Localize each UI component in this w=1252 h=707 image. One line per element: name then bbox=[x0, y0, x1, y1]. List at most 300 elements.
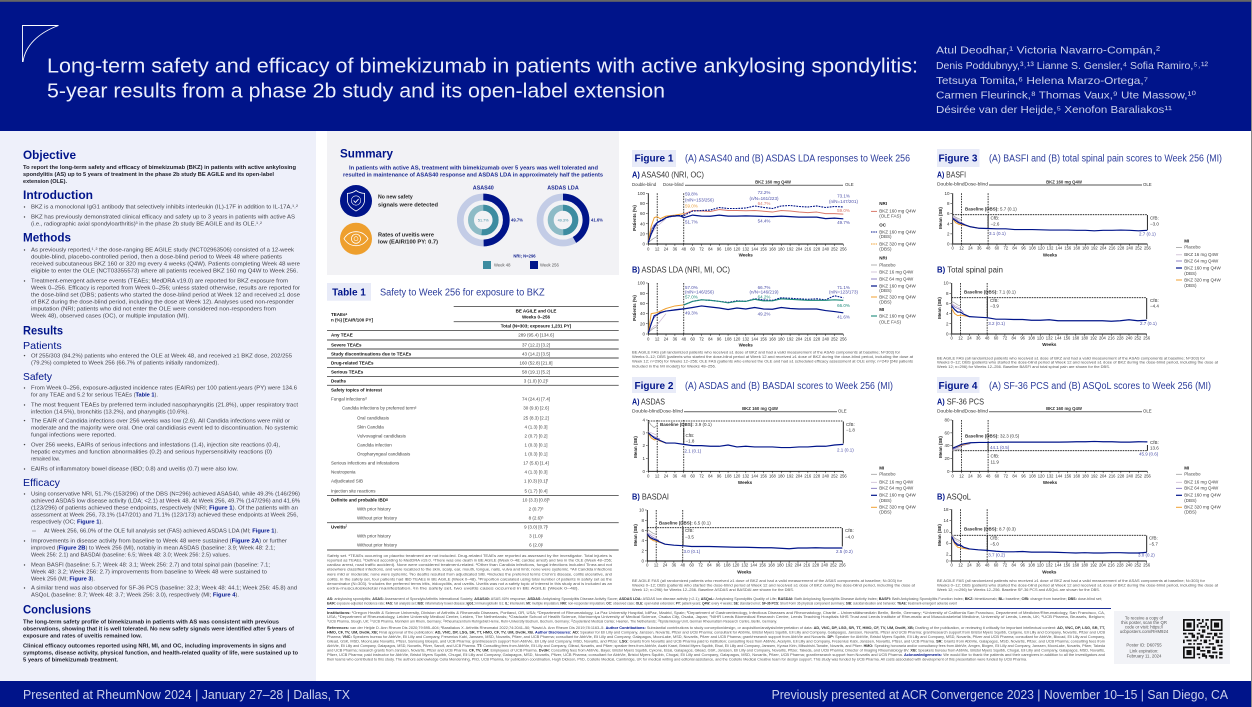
table header cells: Weeks 0–256 bbox=[522, 314, 550, 319]
table rows: safety topics of interest: Oral candidiasis bbox=[357, 416, 390, 421]
table footnote: denominator (N=303). ⁱIncludes the preferred terms iritis, iridocyclitis, and uveitis. Uveitis was not a safety topic of interest in this study and is included as an bbox=[327, 580, 612, 586]
legend figure 1: (DBS) bbox=[879, 288, 892, 293]
figure 1 heading: Figure 1 bbox=[635, 154, 674, 165]
panel: left column background and text bbox=[0, 131, 316, 681]
figure 3 heading: Figure 3 bbox=[939, 154, 978, 165]
line chart: ASDAS LDA: Weeks bbox=[739, 342, 753, 348]
line chart: BASDAI: 0 bbox=[646, 563, 649, 568]
line chart: BASDAI: 3.0 (0.1) bbox=[684, 549, 701, 554]
donut chart: ASDAS LDA: 49.3% bbox=[558, 219, 569, 223]
line chart: ASDAS LDA: Patients (%) bbox=[632, 295, 637, 321]
line chart: ASDAS LDA: 96 bbox=[717, 336, 722, 342]
legend figure 2: (DBS) bbox=[879, 510, 892, 514]
table rows: bold events: 43 (14.2) [3.5] bbox=[522, 352, 550, 357]
legend figure 2: BKZ 16 mg Q4W bbox=[879, 480, 914, 484]
line chart: BASFI: 4 bbox=[947, 221, 950, 226]
legend figure 4: BKZ 64 mg Q4W bbox=[1184, 486, 1219, 490]
treatment timeline: Double-blindDose-blind bbox=[632, 408, 684, 413]
line chart: BASFI: Mean (SE) bbox=[938, 207, 943, 229]
legend figure 2: (DBS) bbox=[879, 498, 892, 503]
line chart: BASFI: 192 bbox=[1091, 246, 1098, 251]
line chart: ASQoL: 6 bbox=[946, 541, 949, 546]
line chart: total spinal pain: 4 bbox=[946, 311, 949, 316]
line chart: ASDAS LDA: (n/N=146/219) bbox=[750, 290, 779, 294]
line chart: ASQoL: −5.7 bbox=[1149, 542, 1158, 546]
line chart: SF-36 PCS: 60 bbox=[995, 474, 1000, 478]
conclusions text: The long-term safety profile of bimekizumab in patients with AS was consistent with previous bbox=[23, 619, 279, 625]
line chart: SF-36 PCS: 252 bbox=[1135, 474, 1143, 478]
table rows: safety topics of interest: Candida infection bbox=[357, 443, 392, 448]
legend figure 3 bbox=[1176, 238, 1222, 288]
line chart: ASAS40: 40 bbox=[640, 221, 645, 226]
treatment timeline A bbox=[632, 179, 854, 187]
abbreviations bbox=[327, 597, 1102, 606]
line chart: total spinal pain: 108 bbox=[1028, 336, 1036, 340]
line chart: ASDAS: 4 bbox=[642, 418, 645, 423]
line chart: total spinal pain: 228 bbox=[1117, 336, 1124, 340]
table rows: safety topics of interest: 5 (1.7) [0.4] bbox=[524, 489, 548, 494]
previously presented at: Previously presented at ACR Convergence 2023 | November 10–15 | San Diego, CA bbox=[772, 688, 1229, 702]
figure 1 footnote bbox=[632, 350, 913, 368]
line chart: ASDAS: Baseline (DBS): 3.9 (0.1) bbox=[660, 422, 712, 427]
icon: shield bbox=[340, 185, 372, 217]
figure 2 footnote bbox=[632, 579, 915, 592]
line chart: ASAS40: 204 bbox=[796, 246, 803, 252]
line chart: total spinal pain: 168 bbox=[1072, 336, 1080, 340]
table rows: IBD and uveitis: With prior history bbox=[357, 507, 392, 512]
line chart: SF-36 PCS: 156 bbox=[1064, 474, 1072, 478]
figure 1 footnote: Weeks 0–12; DBS (patients who started the dose-blind period at Week 12 and received ≥1 dose of BKZ during the dose-blind period, including the dose at bbox=[632, 355, 913, 359]
line chart: ASQoL: CfB: bbox=[990, 536, 999, 540]
line chart: SF-36 PCS: 0 bbox=[947, 469, 950, 474]
line chart: SF-36 PCS: CfB: bbox=[1150, 440, 1159, 445]
line chart: BASFI: 256 bbox=[1144, 246, 1152, 251]
line chart: BASFI: 2.7 (0.1) bbox=[1139, 232, 1156, 236]
conclusions text: symptoms, disease activity, physical function, and health-related quality of life, were sustained up to bbox=[23, 650, 299, 656]
table header cells bbox=[327, 308, 619, 550]
references and disclosures: their teams who contributed to this study. The authors acknowledge Celia Mendenhing, PhD, UCB Pharma, for publication coordination, Hugh Dickson, PhD, Costello Medical, Cambridge, UK for medical writing and editorial assistance, and the Costello Medical Creative team for design support. This study was funded by UCB Pharma. All costs associated with development of this presentation were funded by UCB Pharma. bbox=[327, 658, 1027, 662]
efficacy text: Week 256 (MI; Figure 3). bbox=[31, 577, 95, 583]
line chart: ASQoL: 168 bbox=[1072, 563, 1080, 568]
treatment timeline A: Dose-blind bbox=[663, 182, 684, 187]
line chart: ASQoL: Mean (SE) bbox=[937, 524, 942, 546]
heading: conclusions: Conclusions bbox=[23, 602, 91, 616]
line chart: BASFI: 84 bbox=[1012, 246, 1018, 251]
figure 2 heading bbox=[632, 377, 893, 393]
table heading: Table 1 bbox=[332, 288, 366, 299]
line chart: BASDAI: Baseline (DBS): 6.5 (0.1) bbox=[659, 520, 711, 526]
line chart: ASDAS: 24 bbox=[664, 474, 669, 478]
figure 4 heading: Figure 4 bbox=[939, 381, 978, 392]
line chart: BASFI: −2.6 bbox=[990, 222, 1000, 226]
table rows: bold events: Any TEAE bbox=[331, 333, 353, 338]
text: no new safety signals: signals were detected bbox=[378, 203, 439, 209]
legend figure 4 bbox=[1176, 466, 1222, 514]
title: Long-term safety and efficacy of bimekizumab in patients with active ankylosing spondylitis: bbox=[47, 56, 918, 78]
line chart: SF-36 PCS: 132 bbox=[1047, 474, 1054, 478]
line chart: SF-36 PCS: 120 bbox=[1038, 474, 1045, 478]
line chart: ASDAS: 240 bbox=[822, 474, 830, 478]
line chart: SF-36 PCS: 60 bbox=[944, 430, 950, 435]
authors: Désirée van der Heijde,⁵ Xenofon Baraliakos¹¹ bbox=[936, 104, 1173, 116]
line chart: ASAS40: 49.7% bbox=[837, 220, 850, 225]
line chart: ASAS40: 132 bbox=[742, 246, 750, 252]
line chart: ASDAS LDA: 57.0% bbox=[685, 285, 698, 290]
donut chart: ASDAS LDA: 41.6% bbox=[591, 218, 603, 223]
treatment timeline: OLE bbox=[838, 409, 847, 414]
line chart: ASQoL: 3.0 (0.2) bbox=[1138, 552, 1155, 558]
line chart: BASDAI: 72 bbox=[698, 563, 703, 568]
line chart: BASDAI: 8 bbox=[641, 518, 644, 523]
line chart: ASAS40: 24 bbox=[664, 246, 669, 252]
figure 4 heading: (A) SF-36 PCS and (B) ASQoL scores to Week 256 (MI) bbox=[989, 381, 1211, 392]
table rows: bold events: Severe TEAEs bbox=[331, 342, 362, 347]
line chart: ASAS40: 144 bbox=[751, 246, 759, 252]
safety text: remained low. bbox=[31, 456, 60, 462]
authors: Denis Poddubnyy,³˒¹³ Lianne S. Gensler,⁴ Sofia Ramiro,⁵˒¹² bbox=[936, 60, 1208, 72]
line chart: BASDAI: 240 bbox=[821, 563, 829, 568]
line chart: ASDAS LDA: 41.6% bbox=[837, 314, 850, 319]
line chart: BASDAI: 192 bbox=[786, 563, 793, 568]
treatment timeline: BKZ 160 mg Q4W bbox=[742, 406, 779, 411]
line chart: total spinal pain: 256 bbox=[1143, 336, 1151, 340]
line chart: ASDAS LDA bbox=[632, 281, 858, 348]
line chart: ASAS40: 96 bbox=[717, 246, 722, 252]
references and disclosures: Pfizer, UCB Pharma; paid instructor for AbbVie, Bristol Myers Squibb, Chugai, Eli Lilly and Company, Galapagos, MSD, Novartis, Pfizer, UCB Pharma; consultant for AbbVie, Bristol Myers Squibb, Chugai, Eli Lilly and Company, Galapagos, MSD, Novartis, Pfizer, UCB Pharma; grant/research support from Novartis and UCB Pharma. Acknowledgements: We would like to thank the patients and their caregivers in addition to all the investigators and bbox=[327, 653, 1105, 657]
line chart: SF-36 PCS: 11.9 bbox=[990, 460, 999, 464]
line chart: ASDAS LDA: 60 bbox=[640, 301, 645, 306]
figure 2 heading: (A) ASDAS and (B) BASDAI scores to Week 256 (MI) bbox=[685, 381, 893, 392]
line chart: BASDAI: 252 bbox=[830, 563, 838, 568]
efficacy text: ASQoL (baseline: 8.7; Week 48: 3.7; Week 256: 3.0), respectively (MI; Figure 4 ). bbox=[31, 593, 239, 599]
legend figure 4: (DBS) bbox=[1184, 498, 1197, 503]
table rows: IBD and uveitis: With prior history bbox=[357, 534, 392, 539]
line chart: BASFI: 24 bbox=[968, 246, 973, 251]
line chart: ASQoL: 0 bbox=[946, 559, 949, 564]
methods text: the dose-blind set (DBS; patients who started the dose-blind period at Week 12 and received ≥1 dose bbox=[31, 293, 300, 299]
line chart: BASFI: 156 bbox=[1064, 246, 1072, 251]
line chart: BASDAI: 204 bbox=[795, 563, 802, 568]
line chart: ASAS40: 120 bbox=[733, 246, 741, 252]
panel: figure 3 bbox=[937, 149, 1222, 369]
line chart: ASDAS: 0 bbox=[647, 474, 650, 478]
methods text: eligible to enter the OLE (NCT03355573) where all patients received BKZ 160 mg Q4W to Week 256. bbox=[31, 269, 298, 275]
QR instructions: February 11, 2024 bbox=[1127, 654, 1162, 658]
subheading: patients: Patients bbox=[23, 340, 62, 352]
line chart: ASAS40: 51.7% bbox=[685, 220, 698, 224]
line chart: ASAS40: (n/N=153/256) bbox=[685, 198, 714, 202]
line chart: BASFI: 72 bbox=[1004, 246, 1009, 251]
legend figure 3: (DBS) bbox=[1184, 271, 1197, 276]
line chart: ASAS40: 192 bbox=[787, 246, 794, 252]
line chart: ASDAS LDA: 252 bbox=[831, 336, 839, 342]
line chart: SF-36 PCS: 192 bbox=[1091, 474, 1098, 478]
line chart: ASQoL: 0 bbox=[951, 563, 954, 568]
line chart: ASDAS: 2 bbox=[642, 443, 645, 448]
figure 1 footnote: included in the MI model]) for Weeks 48–256. bbox=[632, 364, 716, 368]
treatment timeline bbox=[937, 406, 1152, 414]
institutions bbox=[327, 611, 1105, 624]
line chart: ASQoL bbox=[937, 507, 1158, 574]
text: uveitis rates bbox=[378, 233, 438, 246]
line chart: ASAS40: 59.8% bbox=[685, 192, 698, 196]
line chart: BASDAI: 2 bbox=[641, 548, 644, 553]
line chart: ASDAS: 192 bbox=[787, 474, 794, 478]
legend figure 1: Placebo bbox=[879, 262, 896, 267]
abbreviations: AS: ankylosing spondylitis; ASAS: Assessment of SpondyloArthritis international Society; ASAS40: ASAS 40% response; ASDAS: Ankylosing Spondylitis Disease Activity Score; ASDAS LDA: ASDAS low disease activity (<2.1); ASQoL: Ankylosing Spondylitis Quality of Life; BASDAI: Bath Ankylosing Spondylitis Disease Activity Index; BASFI: Bath Ankylosing Spondylitis Function Index; BKZ: bimekizumab; BL: baseline; CfB: change from baseline; DBS: dose-blind set; bbox=[327, 597, 1102, 601]
line chart: ASDAS: −1.8 bbox=[686, 438, 695, 444]
line chart: BASDAI: 4 bbox=[641, 538, 644, 543]
line chart: ASAS40: 20 bbox=[640, 232, 645, 236]
figure 1 heading: (A) ASAS40 and (B) ASDAS LDA responses to Week 256 bbox=[685, 154, 910, 165]
line chart: ASQoL: 18 bbox=[943, 507, 949, 512]
legend figure 1: BKZ 160 mg Q4W bbox=[879, 229, 917, 234]
line chart: BASDAI: 2.5 (0.2) bbox=[836, 549, 853, 554]
line chart: ASDAS: 36 bbox=[673, 474, 678, 478]
references and disclosures: Gilead, GSK, MSD, MoonLake Novartis, Pfizer, Samsung Bioepis, and UCB Pharma; grant/research support from AbbVie, Eli Lilly and Company, MSD, Novartis, and Pfizer. LSG: Grants from Novartis and UCB Pharma paid to institution; consulting fees from AbbVie, Acelyrin, Eli Lilly and Company, Fresenius Kabi, Janssen, Novartis, Pfizer, and UCB Pharma. SR: Grants from AbbVie, Galapagos, MSD, Novartis, Pfizer, and UCB Pharma; consulting fees from bbox=[327, 640, 1105, 644]
line chart: total spinal pain: CfB: bbox=[1150, 298, 1159, 303]
line chart: total spinal pain: −4.4 bbox=[1150, 303, 1159, 308]
footer banner bbox=[0, 681, 1252, 707]
figure 2 heading: Figure 2 bbox=[635, 381, 674, 392]
line chart: ASDAS: CfB: bbox=[846, 422, 855, 427]
table rows: safety topics of interest: 17 (5.6) [1.4] bbox=[523, 461, 549, 466]
safety text: EAIRs of inflammatory bowel disease (IBD; 0.8) and uveitis (0.7) were also low. bbox=[31, 467, 238, 473]
objective text: extension (OLE). bbox=[23, 179, 68, 185]
line chart: ASQoL: 108 bbox=[1028, 563, 1036, 568]
line chart: total spinal pain: 96 bbox=[1020, 336, 1026, 340]
line chart: ASAS40: 80 bbox=[640, 201, 645, 206]
line chart: ASQoL: Weeks bbox=[1042, 570, 1057, 574]
line chart: ASQoL: 120 bbox=[1037, 563, 1044, 568]
line chart: SF-36 PCS: 180 bbox=[1082, 474, 1090, 478]
line chart: ASDAS LDA: 0 bbox=[647, 336, 650, 342]
table rows: safety topics of interest bbox=[331, 388, 550, 494]
heading: objective: Objective bbox=[23, 148, 76, 162]
line chart: SF-36 PCS: 240 bbox=[1126, 474, 1134, 478]
efficacy text: respectively (OC; Figure 1 ). bbox=[31, 520, 103, 526]
figure 2 footnote: BE AGILE FAS (all randomized patients who received ≥1 dose of BKZ and had a valid measurement of the ASAS components at baseline; N=303) for bbox=[632, 579, 903, 583]
legend figure 4: MI bbox=[1184, 466, 1189, 470]
line chart: ASQoL: 156 bbox=[1063, 563, 1071, 568]
safety text: Over 256 weeks, EAIRs of serious infections and infestations (1.4), injection site reactions (0.4), bbox=[31, 442, 281, 448]
introduction text: BKZ has previously demonstrated clinical efficacy and safety up to 3 years in patients with active AS bbox=[31, 215, 295, 221]
treatment timeline: BKZ 160 mg Q4W bbox=[1046, 179, 1083, 184]
references and disclosures: HMO, CF, TV, UM, DvdH, XB; Final approval of the publication: AD, VNC, DP, LSG, SR, TT, HMO, CF, TV, UM, DvdH, XB. Author Disclosures: AD: Speaker for Eli Lilly and Company, Janssen, Novartis, Pfizer and UCB Pharma; consultant for AbbVie, Bristol Myers Squibb, Eli Lilly and Company, Galapagos, Janssen, Novartis, Pfizer and UCB Pharma; grant/research support from Bristol Myers Squibb, Celgene, Eli Lilly and Company, Novartis, Pfizer and UCB bbox=[327, 630, 1106, 634]
institutions: USA; ⁵Department of Rheumatology, Leiden University Medical Center, Leiden, The Netherlands; ⁶Graduate School of Health Science, Morinomiya University of Medical Science, Osaka City, Osaka, Japan; ⁷NIHR Leeds Biomedical Research Centre, Leeds Teaching Hospitals NHS Trust and Leeds Institute of Rheumatic and Musculoskeletal Medicine, University of Leeds, Leeds, UK; ⁸UCB Pharma, Brussels, Belgium; bbox=[327, 615, 1105, 619]
figure 4 footnote: BE AGILE FAS (all randomized patients who received ≥1 dose of BKZ and had a valid measurement of the ASAS components at baseline; N=303) for bbox=[937, 579, 1206, 583]
line chart: total spinal pain: 72 bbox=[1003, 336, 1008, 340]
line chart: ASAS40: 228 bbox=[813, 246, 821, 252]
table rows: safety topics of interest: Candida infections by preferred termᵉ bbox=[342, 406, 417, 411]
figure 1 heading bbox=[632, 150, 910, 167]
legend figure 2: Placebo bbox=[879, 472, 896, 476]
table rows: IBD and uveitis: 6 (2.0)ʲ bbox=[529, 543, 543, 548]
line chart: BASDAI: 156 bbox=[759, 563, 767, 568]
text: uveitis rates: Rates of uveitis were bbox=[378, 233, 434, 239]
line chart: BASFI: 0 bbox=[952, 246, 955, 251]
conclusions text: 5 years of bimekizumab treatment. bbox=[23, 657, 119, 663]
QR instructions: To receive a copy of bbox=[1125, 616, 1164, 620]
line chart: total spinal pain: 10 bbox=[943, 281, 949, 286]
references and disclosures: Pharma; VNC: Speakers bureau for AbbVie, Eli Lilly and Company, Fresenius Kabi, Janssen, MSD, Novartis, Pfizer, and UCB Pharma; consultant for AbbVie, Eli Lilly and Company, Galapagos, MoonLake, MSD, Novartis, Pfizer and UCB Pharma; grant/research support from AbbVie and Novartis. DP: Speaker for AbbVie, Bristol Myers Squibb, Eli Lilly and Company, MSD, Novartis, Pfizer and UCB Pharma; consultant for AbbVie, Biocad, Eli Lilly and Company, bbox=[327, 635, 1105, 639]
line chart: BASFI: 12 bbox=[959, 246, 965, 251]
figure 4 footnote: Weeks 0–12; DBS (patients who started the dose-blind period at Week 12 and received ≥1 dose of BKZ during the dose-blind period, including the dose at bbox=[937, 584, 1218, 588]
line chart: total spinal pain: 0 bbox=[946, 332, 949, 337]
references and disclosures bbox=[327, 626, 1106, 662]
line chart: ASDAS LDA: 256 bbox=[840, 336, 847, 342]
legend figure 3: Placebo bbox=[1184, 245, 1201, 250]
line chart: ASDAS LDA: 192 bbox=[787, 336, 794, 342]
chart A heading: A) ASDAS bbox=[632, 397, 665, 406]
legend figure 3: BKZ 160 mg Q4W bbox=[1184, 265, 1222, 270]
introduction text bbox=[24, 205, 298, 228]
efficacy text: improved ( Figure 2B ) to Week 256 (MI), notably in mean ASDAS (baseline: 3.9; Week 48: 2.1; bbox=[31, 546, 276, 552]
table footnote: elsewhere classified infections, and were localized to the skin, scalp, ear, mouth, tongue, nails, vulva and limb; none were systemic. ᵉAll Candida infections bbox=[327, 568, 612, 572]
line chart: total spinal pain: 252 bbox=[1134, 336, 1142, 340]
line chart: total spinal pain: 2 bbox=[946, 321, 949, 326]
legend figure 4: BKZ 160 mg Q4W bbox=[1184, 492, 1222, 498]
treatment timeline A: BKZ 160 mg Q4W bbox=[755, 179, 792, 184]
line chart: total spinal pain: 3.2 (0.1) bbox=[988, 321, 1006, 326]
line chart: BASDAI: Mean (SE) bbox=[633, 524, 638, 546]
panel: figure 2 bbox=[632, 377, 917, 592]
line chart: ASQoL: 132 bbox=[1046, 563, 1053, 568]
line chart: BASFI: 132 bbox=[1047, 246, 1054, 251]
safety text: The most frequent TEAEs by preferred term included nasopharyngitis (21.8%), upper respiratory tract bbox=[31, 403, 299, 409]
line chart: BASDAI: 180 bbox=[777, 563, 784, 568]
line chart: SF-36 PCS: 40 bbox=[944, 443, 950, 448]
references and disclosures: AbbVie, Eli Lilly and Company, Galapagos, MSD, Novartis, Pfizer, Sanofi, and UCB Pharma. TT: Consulting fees from AbbVie, Eli Lilly and Company, Gilead, Novartis, and Pfizer; speaker fees from AbbVie, Asahi Kasei, Bristol Myers Squibb, Eisai, Eli Lilly and Company, Janssen, Kyowa Kirin, Mitsubishi-Tanabe, Novartis, and Pfizer. HMO: Speaking honoraria and/or consultancy fees from AbbVie, Amgen, Biogen, Eli Lilly and Company, Janssen, MoonLake, Novartis, Pfizer, Takeda bbox=[327, 644, 1106, 648]
table rows: safety topics of interest: 25 (8.3) [2.2] bbox=[523, 416, 549, 421]
objective text bbox=[23, 165, 296, 185]
line chart: SF-36 PCS: 36 bbox=[977, 474, 982, 478]
line chart: ASDAS: 108 bbox=[725, 474, 732, 478]
table rows: IBD and uveitis: Definite and probable IBDᵍ bbox=[331, 498, 388, 503]
line chart: ASQoL: 252 bbox=[1134, 563, 1142, 568]
line chart: ASDAS LDA: (n/N=146/256) bbox=[685, 290, 714, 294]
line chart: SF-36 PCS: Baseline (DBS): 32.3 (0.5) bbox=[965, 434, 1020, 438]
line chart: BASFI: 120 bbox=[1038, 246, 1045, 251]
methods text: of BKZ during the dose-blind period, including the dose at Week 12). Analyses used non-responder bbox=[31, 300, 294, 306]
table rows: safety topics of interest: 1 (0.3) [0.1]ᶠ bbox=[524, 479, 548, 484]
line chart: BASDAI: 120 bbox=[732, 563, 740, 568]
line chart: SF-36 PCS: 45.9 (0.6) bbox=[1139, 452, 1159, 456]
line chart: ASDAS: 96 bbox=[717, 474, 722, 478]
legend figure 1: BKZ 320 mg Q4W bbox=[879, 241, 917, 246]
QR instructions bbox=[1120, 616, 1169, 658]
table rows: safety topics of interest: 4 (1.3) [0.3] bbox=[524, 470, 548, 475]
line chart: SF-36 PCS: 204 bbox=[1100, 474, 1107, 478]
line chart: ASAS40: Weeks bbox=[739, 252, 753, 258]
QR instructions: this poster, scan the QR bbox=[1121, 620, 1167, 625]
line chart: ASQoL: 216 bbox=[1108, 563, 1115, 568]
table rows: IBD and uveitis: Without prior history bbox=[357, 543, 398, 548]
line chart: ASDAS: 228 bbox=[813, 474, 821, 478]
table header cells: TEAEsᵃ bbox=[331, 312, 348, 317]
line chart: BASDAI: 132 bbox=[741, 563, 749, 568]
legend figure 1: NRI bbox=[879, 255, 887, 260]
institutions: ⁹UCB Pharma, Slough, UK; ¹⁰UCB Pharma, Monheim am Rhein, Germany; ¹¹Rheumazentrum Ruhrgebiet Herne, Ruhr-University Bochum, Bochum, Germany; ¹²Zuyderland Medical Center, Heerlen, The Netherlands; ¹³Epidemiology Unit, German Rheumatism Research Centre, Berlin, Germany. bbox=[327, 620, 777, 624]
line chart: ASDAS: Weeks bbox=[738, 480, 753, 485]
line chart: ASQoL: 144 bbox=[1055, 563, 1062, 568]
line chart: BASFI: 48 bbox=[986, 246, 991, 251]
conclusions text: observations, showing that it is well tolerated. No new safety signals were identified after 5 years of bbox=[23, 626, 294, 632]
line chart: total spinal pain: Baseline (DBS): 7.1 (0.1) bbox=[964, 290, 1016, 294]
line chart: ASAS40: 100 bbox=[637, 191, 645, 196]
table rows: bold events: 160 (52.8) [21.8] bbox=[519, 361, 553, 366]
text: no new safety signals bbox=[378, 195, 439, 209]
legend figure 4: Placebo bbox=[1184, 472, 1201, 476]
table rows: safety topics of interest: Fungal infectionsᵈ bbox=[331, 397, 367, 402]
line chart: ASAS40: 12 bbox=[655, 246, 660, 252]
legend figure 4: BKZ 16 mg Q4W bbox=[1184, 480, 1219, 484]
line chart: ASDAS: 204 bbox=[796, 474, 803, 478]
line chart: SF-36 PCS: 12 bbox=[959, 474, 965, 478]
line chart: ASDAS: 180 bbox=[778, 474, 785, 478]
treatment timeline: BKZ 160 mg Q4W bbox=[1046, 406, 1083, 411]
line chart: ASDAS LDA: 120 bbox=[733, 336, 741, 342]
methods text: received subcutaneous BKZ 160 or 320 mg every 4 weeks (Q4W). Patients completing Week 48 were bbox=[31, 262, 300, 268]
line chart: SF-36 PCS: Weeks bbox=[1043, 480, 1058, 485]
figure 3 heading: (A) BASFI and (B) total spinal pain scores to Week 256 (MI) bbox=[989, 154, 1222, 165]
line chart: ASQoL: 204 bbox=[1099, 563, 1107, 568]
line chart: total spinal pain: 60 bbox=[994, 336, 999, 340]
QR instructions: code or visit: https:// bbox=[1125, 624, 1164, 630]
legend figure 1: (OLE FAS) bbox=[879, 319, 902, 324]
line chart: ASDAS LDA: 0 bbox=[642, 332, 645, 337]
efficacy text: assessment at Week 256, 73.1% (147/201) and 71.1% (123/173) achieved these endpoints at Week 256, bbox=[31, 513, 299, 519]
line chart: SF-36 PCS: 24 bbox=[968, 474, 973, 478]
figure 3 footnote: BE AGILE FAS (all randomized patients who received ≥1 dose of BKZ and had a valid measurement of the ASAS components at baseline; N=303) for bbox=[937, 356, 1206, 360]
line chart: SF-36 PCS: 0 bbox=[952, 474, 955, 478]
line chart: ASAS40: 0 bbox=[647, 246, 650, 252]
line chart: SF-36 PCS: 144 bbox=[1055, 474, 1063, 478]
line chart: ASDAS LDA: 66.7% bbox=[758, 285, 770, 290]
line chart: ASDAS LDA: 180 bbox=[778, 336, 785, 342]
line chart: ASDAS: 120 bbox=[733, 474, 741, 478]
table footnote: reported as TEAEs. ᵇDefined according to MedDRA v19.0. ᶜThere was one death in BE AGILE (Week 0–48; cardiac arrest) and two in the OLE (Week 48–256; bbox=[327, 558, 612, 562]
subheading: safety: Safety bbox=[23, 371, 53, 383]
panel: figure 1 bbox=[632, 150, 917, 368]
legend figure 1: MI bbox=[879, 307, 884, 312]
line chart: BASFI: 10 bbox=[944, 191, 950, 196]
authors: Carmen Fleurinck,⁸ Thomas Vaux,⁹ Ute Massow,¹⁰ bbox=[936, 90, 1197, 102]
donut legend bbox=[483, 254, 559, 269]
line chart: ASDAS: 132 bbox=[742, 474, 750, 478]
line chart: total spinal pain: 2.7 (0.1) bbox=[1140, 321, 1157, 326]
line chart: ASDAS LDA: 228 bbox=[813, 336, 821, 342]
patients text: Of 255/303 (84.2%) patients who entered the OLE at Week 48, and received ≥1 BKZ dose, 202/255 bbox=[31, 353, 292, 359]
legend figure 3: BKZ 320 mg Q4W bbox=[1184, 277, 1222, 282]
line chart: BASFI: Baseline (DBS): 5.7 (0.1) bbox=[965, 206, 1017, 212]
legend figure 1: BKZ 160 mg Q4W bbox=[879, 313, 917, 318]
line chart: ASQoL: Baseline (DBS): 8.7 (0.3) bbox=[964, 526, 1016, 532]
line chart: SF-36 PCS: 84 bbox=[1012, 474, 1018, 478]
line chart: ASAS40: 168 bbox=[769, 246, 777, 252]
table rows: bold events: 37 (12.2) [3.2] bbox=[522, 342, 550, 347]
table rows: safety topics of interest: 74 (24.4) [7.4] bbox=[522, 397, 550, 402]
line chart: ASQoL: 180 bbox=[1081, 563, 1089, 568]
legend figure 1: BKZ 16 mg Q4W bbox=[879, 269, 914, 274]
text: no new safety signals: No new safety bbox=[378, 195, 414, 201]
summary statement: In patients with active AS, treatment with bimekizumab over 5 years was well tolerated and bbox=[349, 166, 598, 172]
table rows: safety topics of interest: Injection site reactions bbox=[331, 489, 376, 494]
line chart: total spinal pain: 24 bbox=[967, 336, 972, 340]
line chart: total spinal pain: 48 bbox=[985, 336, 990, 340]
figure 3 footnote: Weeks 0–12; DBS (patients who started the dose-blind period at Week 12 and received ≥1 dose of BKZ during the dose-blind period, including the dose at bbox=[937, 360, 1218, 364]
donut chart: ASAS40: 51.7% bbox=[478, 219, 489, 223]
